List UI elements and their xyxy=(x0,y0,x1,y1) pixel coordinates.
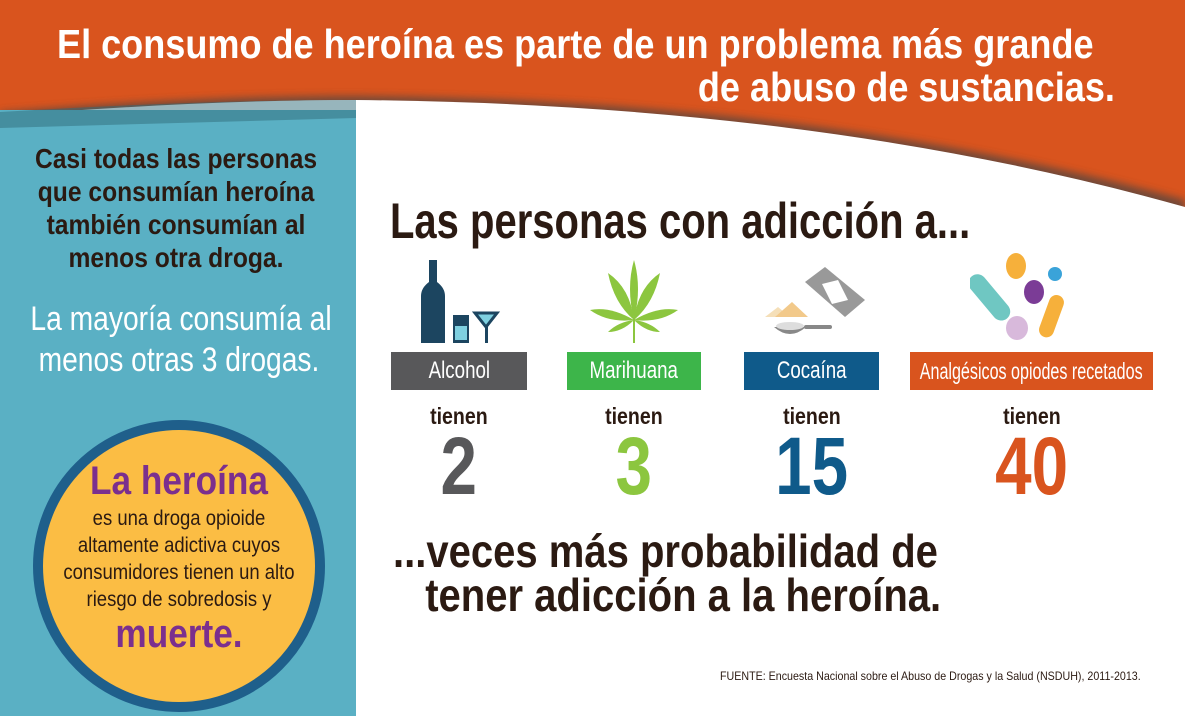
label: Alcohol: Alcohol xyxy=(428,357,490,384)
stat: opioids: tienen xyxy=(1003,403,1060,429)
label: Cocaína xyxy=(744,352,879,390)
title: de abuso de sustancias. xyxy=(698,64,1115,110)
circle callout: consumidores tienen un alto xyxy=(63,561,295,584)
conclusion text: tener adicción a la heroína. xyxy=(425,569,941,621)
circle callout: es una droga opioide xyxy=(93,507,265,530)
left text: majority: La mayoría consumía al xyxy=(30,300,332,338)
icon: pills xyxy=(970,253,1064,340)
stat: alcohol: 2 xyxy=(441,421,477,512)
circle callout: muerte. xyxy=(115,612,243,656)
conclusion text: ...veces más probabilidad de xyxy=(393,525,938,577)
title xyxy=(57,21,1115,110)
left text block: también consumían al xyxy=(47,209,305,240)
heading: Las personas con adicción a... xyxy=(390,193,970,249)
icon: alcohol xyxy=(421,260,500,343)
stat: marihuana: tienen xyxy=(605,403,663,429)
left text block: Casi todas las personas xyxy=(35,143,317,174)
stat: marihuana xyxy=(605,403,663,512)
left text block: que consumían heroína xyxy=(38,176,314,207)
stat: marihuana: 3 xyxy=(616,421,652,512)
label: Alcohol xyxy=(391,352,527,390)
circle callout: riesgo de sobredosis y xyxy=(87,588,271,611)
label: Analgésicos xyxy=(910,352,1153,390)
stat: cocaine: 15 xyxy=(775,421,848,512)
label: Analgésicos: Analgésicos opiodes recetados xyxy=(920,358,1143,384)
label: Marihuana xyxy=(567,352,701,390)
label: Cocaína: Cocaína xyxy=(777,357,846,384)
stat: alcohol: tienen xyxy=(430,403,488,429)
circle callout xyxy=(33,420,325,712)
stat: opioids: 40 xyxy=(995,421,1068,512)
circle callout: altamente adictiva cuyos xyxy=(78,534,280,557)
conclusion text xyxy=(393,525,941,621)
icon: marijuana leaf xyxy=(590,260,678,343)
stat: alcohol xyxy=(430,403,488,512)
left text: majority xyxy=(30,300,332,379)
icon: cocaine xyxy=(765,267,865,334)
stat: cocaine: tienen xyxy=(783,403,840,429)
title: El consumo de heroína es parte de un problema más grande xyxy=(57,21,1094,67)
left text: majority: menos otras 3 drogas. xyxy=(39,341,319,379)
left text block: menos otra droga. xyxy=(69,242,283,273)
label: Marihuana: Marihuana xyxy=(590,357,678,384)
left text block xyxy=(35,143,317,273)
circle callout: La heroína xyxy=(90,459,268,503)
source: FUENTE: Encuesta Nacional sobre el Abuso de Drogas y la Salud (NSDUH), 2011-2013. xyxy=(720,669,1141,683)
